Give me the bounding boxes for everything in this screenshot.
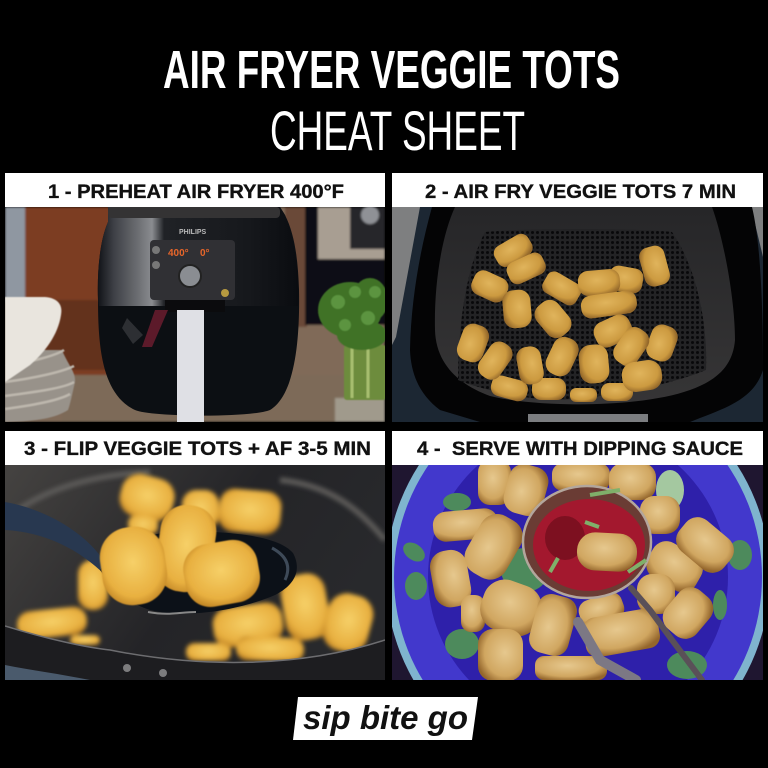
veggie tots (427, 460, 740, 681)
heading: step 2 (392, 173, 763, 207)
title (163, 40, 620, 162)
heading: step 3: 3 - FLIP VEGGIE TOTS + AF 3-5 MIN (24, 438, 371, 460)
heading: step 4 (392, 431, 763, 465)
photo: spoon lifting tots (5, 465, 385, 680)
heading: step 1: 1 - PREHEAT AIR FRYER 400°F (48, 181, 344, 203)
logo: sip bite go: sip bite go (303, 699, 468, 736)
panel: step 3 flip (5, 431, 385, 680)
panel: step 4 serve (392, 431, 763, 680)
icon: air fryer (98, 207, 299, 422)
photo: tots with dipping sauce (392, 465, 763, 680)
panel: step 1 preheat (5, 173, 388, 422)
panel: step 2 air fry (392, 173, 763, 422)
heading: step 4: 4 - SERVE WITH DIPPING SAUCE (417, 438, 743, 460)
icon: air fryer: 400° (168, 248, 189, 259)
icon: air fryer basket (392, 207, 763, 422)
veggie tots (454, 231, 681, 403)
ketchup bowl (523, 486, 651, 598)
tongs (578, 588, 702, 680)
title: CHEAT SHEET (270, 99, 525, 162)
photo: tots in basket (392, 207, 763, 422)
icon: air fryer: 0° (200, 248, 210, 259)
cilantro garnish (400, 470, 752, 679)
veggie tots on spoon (96, 502, 264, 611)
heading: step 3 (5, 431, 385, 465)
heading: step 2: 2 - AIR FRY VEGGIE TOTS 7 MIN (425, 181, 736, 203)
icon: cilantro in jar (318, 278, 388, 400)
photo: air fryer on counter (5, 206, 388, 422)
icon: air fryer: PHILIPS (179, 229, 207, 236)
heading: step 1 (5, 173, 385, 207)
purple plate (392, 465, 763, 680)
spoon (5, 502, 297, 614)
blurred tots in basket (16, 470, 378, 662)
basket rim (5, 626, 385, 680)
icon: bowl and plates (5, 297, 75, 422)
